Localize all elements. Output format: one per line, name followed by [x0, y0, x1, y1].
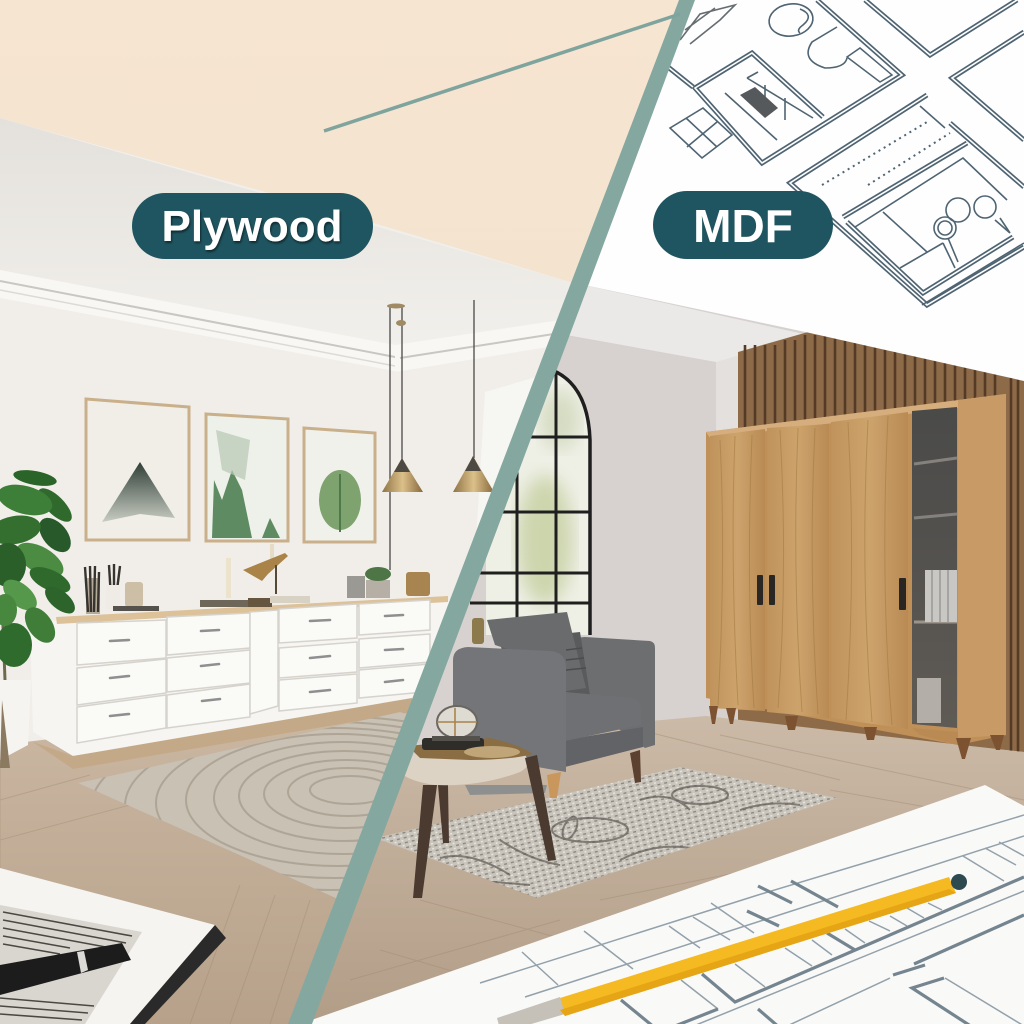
label: MDF: MDF	[693, 200, 793, 252]
notebook with pen	[0, 868, 226, 1024]
glass door	[912, 407, 957, 728]
door panels	[710, 412, 908, 729]
thin drafting lines	[480, 815, 1024, 1024]
beige header band	[0, 0, 690, 285]
armchair	[453, 612, 655, 798]
label: Plywood	[132, 193, 373, 259]
potted plant	[0, 467, 80, 768]
wall	[176, 330, 396, 372]
label: MDF	[653, 191, 833, 259]
furniture linework	[670, 1, 1024, 305]
accent line	[324, 14, 680, 131]
double walled rooms	[668, 0, 1024, 305]
print: trees	[206, 414, 288, 541]
slatted wood wall	[738, 332, 1024, 752]
ceiling	[0, 118, 259, 220]
ceiling	[570, 286, 802, 362]
wardrobe	[706, 394, 1006, 759]
wall artwork: three framed prints	[86, 399, 375, 542]
panel: plywood room	[0, 0, 679, 1024]
sideboard with drawers	[30, 596, 470, 769]
diagonal divider	[288, 0, 695, 1024]
window left part	[477, 378, 534, 528]
side table with ornament	[395, 706, 556, 898]
patterned rug	[375, 767, 838, 898]
window right part	[470, 370, 590, 635]
panel: MDF room	[314, 0, 1024, 1024]
blueprint top sheet	[575, 0, 1024, 381]
print: mountain	[86, 399, 189, 540]
rug: ring pattern	[78, 712, 406, 898]
pendant lamps	[382, 300, 494, 570]
floor	[0, 712, 407, 1024]
floor	[300, 716, 1024, 1024]
blueprint sheet with pencil	[300, 785, 1024, 1024]
wall	[420, 332, 716, 760]
heavy wall lines	[621, 877, 1024, 1024]
print: leaf	[304, 428, 375, 542]
small brass bottle	[472, 618, 484, 644]
label: Plywood: Plywood	[162, 202, 342, 251]
countertop decor	[85, 544, 430, 614]
crown molding	[0, 270, 560, 372]
